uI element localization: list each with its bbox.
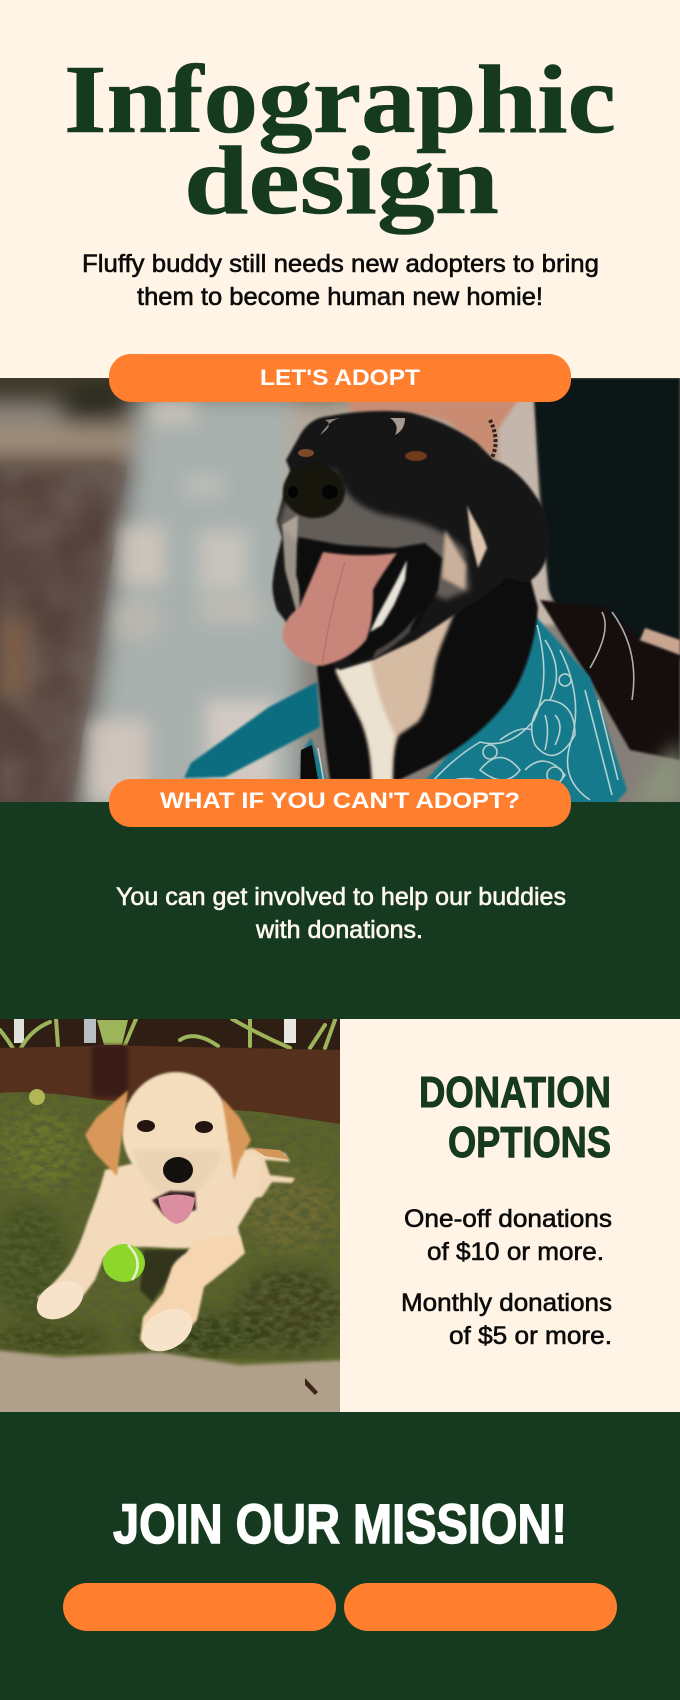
- intro text: Fluffy buddy still needs new adopters to bring: [82, 250, 599, 278]
- wooden planter: [0, 1045, 340, 1126]
- heading: donation options: DONATION: [419, 1068, 611, 1117]
- rear legs: [245, 1146, 296, 1200]
- bandana pattern: [318, 625, 618, 800]
- eyes: [137, 1120, 155, 1132]
- mouth and tongue: [152, 1191, 196, 1216]
- donation options list: Monthly donations: [401, 1289, 612, 1317]
- panel: green donation section: [0, 802, 680, 1019]
- button: empty left: [63, 1583, 336, 1631]
- title: design: [184, 127, 499, 235]
- button: empty right: [344, 1583, 617, 1631]
- panel: green footer: [0, 1412, 680, 1700]
- grey muzzle: [278, 470, 470, 600]
- bandana tail: [184, 682, 320, 778]
- button: what if you can't adopt: WHAT IF YOU CAN'T ADOPT?: [160, 788, 520, 813]
- fence and plants: [0, 1019, 340, 1053]
- sand: [0, 1350, 345, 1420]
- donation options list: of $10 or more.: [427, 1238, 604, 1266]
- tennis ball: [103, 1244, 145, 1282]
- nose: [163, 1157, 193, 1183]
- soil mottling: [0, 467, 127, 800]
- body: [37, 1140, 262, 1318]
- eyes: [298, 449, 314, 457]
- title: Infographic: [64, 46, 616, 154]
- shadow between legs: [140, 1250, 190, 1302]
- grass: [0, 1092, 340, 1126]
- button: let's adopt: [109, 354, 571, 402]
- heading: donation options: OPTIONS: [448, 1118, 611, 1167]
- heading: join our mission: JOIN OUR MISSION!: [113, 1492, 567, 1555]
- donations text: [116, 883, 566, 944]
- intro text: [82, 250, 599, 311]
- donations text: You can get involved to help our buddies: [116, 883, 566, 911]
- button: let's adopt: LET'S ADOPT: [260, 365, 421, 390]
- dog neck and body: [317, 570, 538, 780]
- donation options list: of $5 or more.: [449, 1322, 612, 1350]
- panel: cream donation options: [340, 1019, 680, 1412]
- chest fur: [334, 613, 456, 779]
- bandana left corner: [299, 738, 327, 779]
- button: what if you can't adopt: [109, 779, 571, 827]
- paws: [36, 1280, 84, 1320]
- head: [122, 1070, 230, 1165]
- bandana front: [425, 616, 628, 802]
- donation options list: One-off donations: [404, 1205, 612, 1233]
- background bits right: [498, 378, 680, 802]
- head: [272, 411, 550, 670]
- nose: [283, 464, 345, 518]
- heading: donation options: [419, 1068, 611, 1167]
- hand on head: [347, 398, 520, 458]
- photo: black dog with teal bandana: [0, 360, 680, 820]
- far tennis ball: [29, 1089, 45, 1105]
- intro text: them to become human new homie!: [137, 283, 543, 311]
- tongue: [283, 552, 397, 666]
- ears: [85, 1090, 128, 1176]
- photo: puppy with tennis ball: [0, 1019, 345, 1420]
- teeth: [370, 560, 407, 632]
- donation options list: [401, 1205, 612, 1350]
- donations text: with donations.: [255, 916, 423, 944]
- panel: cream header: [0, 0, 680, 378]
- lower lip grey: [372, 616, 418, 660]
- title: [64, 46, 616, 235]
- right front leg: [140, 1235, 245, 1350]
- path highlights: [88, 400, 275, 800]
- open mouth: [298, 537, 442, 662]
